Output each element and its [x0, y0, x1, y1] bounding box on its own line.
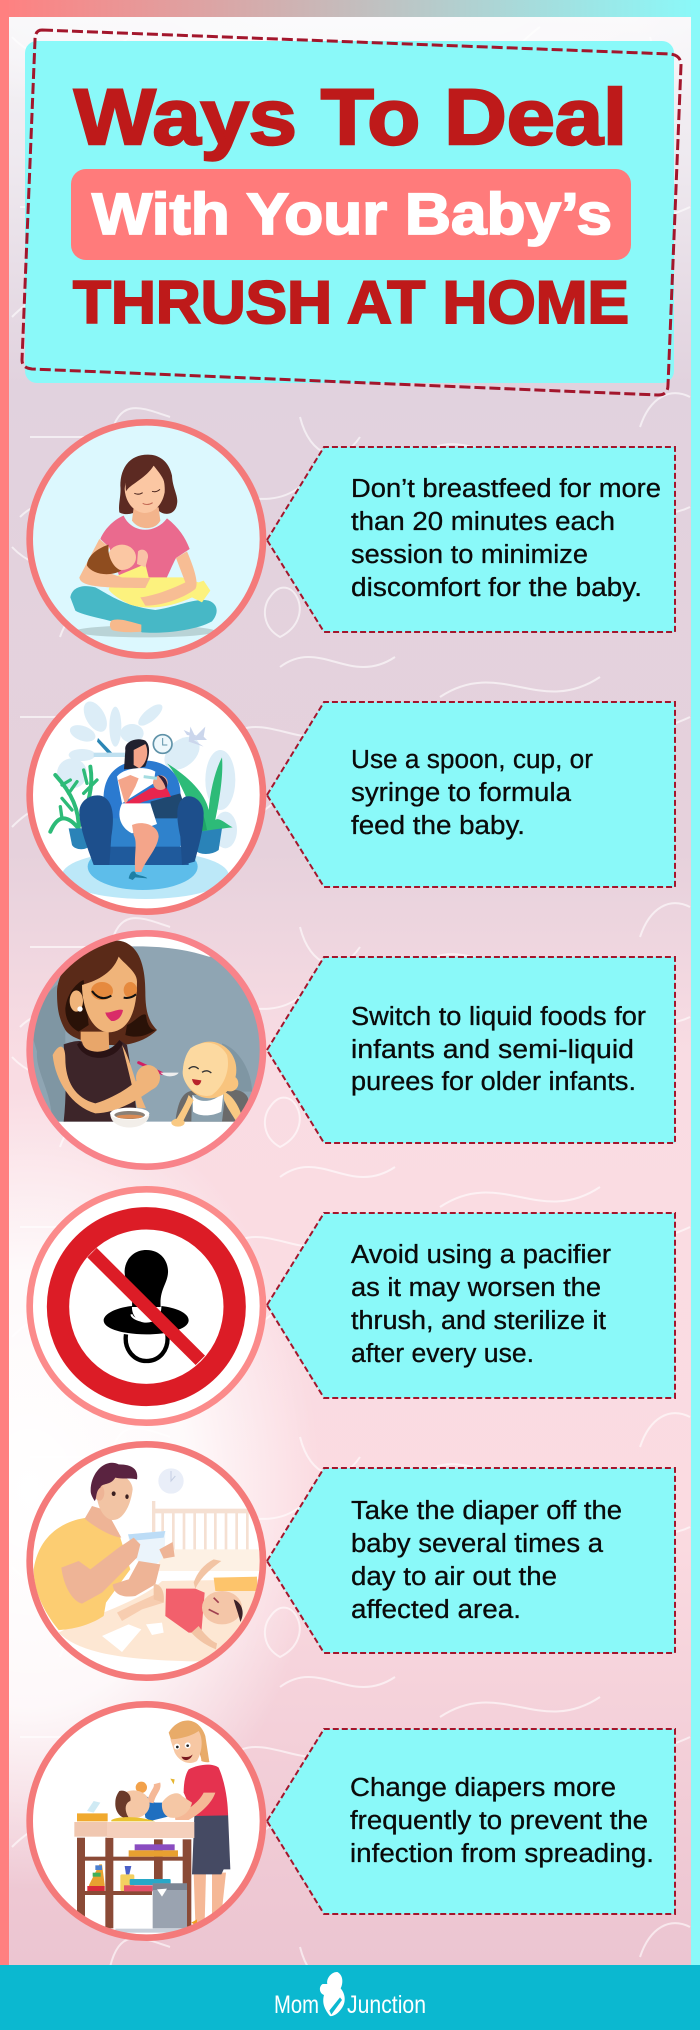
callout shape	[267, 1468, 675, 1653]
callout shape	[267, 447, 675, 632]
callout text: affected area.	[351, 1596, 521, 1624]
title line 2: With Your Baby’s	[92, 182, 612, 247]
callout text	[351, 475, 661, 602]
item 4: callout	[267, 1213, 675, 1398]
callout text: Don’t breastfeed for more	[351, 475, 661, 503]
item 1: callout	[267, 447, 675, 632]
callout text: infants and semi-liquid	[351, 1036, 634, 1064]
callout shape	[267, 702, 675, 887]
callout text: day to air out the	[351, 1563, 557, 1591]
title line 1: Ways To Deal	[74, 72, 627, 161]
item 3: spoon feeding circle	[29, 933, 269, 1167]
callout text: frequently to prevent the	[350, 1807, 648, 1835]
logo text: Junction: Junction	[347, 1991, 426, 2019]
callout text: infection from spreading.	[350, 1840, 654, 1868]
callout shape	[267, 1729, 675, 1914]
title pill	[71, 169, 631, 260]
callout shape	[267, 957, 675, 1143]
item 2: formula feeding circle	[30, 678, 263, 912]
item 3: callout	[267, 957, 675, 1143]
callout text: thrush, and sterilize it	[351, 1307, 606, 1335]
callout text: discomfort for the baby.	[351, 574, 642, 602]
callout text	[351, 1241, 612, 1368]
callout text	[351, 1497, 622, 1624]
item 6: mother at changing table circle	[30, 1704, 263, 1938]
title line 3: THRUSH AT HOME	[73, 269, 629, 336]
callout text	[350, 1774, 654, 1868]
item 5: father changing diaper circle	[30, 1444, 265, 1678]
callout text: baby several times a	[351, 1530, 604, 1558]
item 1: breastfeeding circle	[30, 422, 263, 656]
item 2: callout	[267, 702, 675, 887]
item 6: callout	[267, 1729, 675, 1914]
callout text: Avoid using a pacifier	[351, 1241, 612, 1269]
callout text	[351, 1003, 647, 1096]
icon: prohibition ring	[58, 1218, 235, 1395]
item 4: no pacifier sign	[30, 1189, 263, 1423]
callout text: syringe to formula	[351, 779, 572, 807]
callout text: as it may worsen the	[351, 1274, 601, 1302]
callout text: purees for older infants.	[351, 1068, 636, 1096]
title dashed border	[22, 30, 681, 395]
callout text: session to minimize	[351, 541, 588, 569]
footer bar	[0, 1965, 700, 2030]
icon: mother and child	[320, 1972, 345, 2016]
item 5: callout	[267, 1468, 675, 1653]
title background	[25, 41, 674, 383]
callout text: Take the diaper off the	[351, 1497, 622, 1525]
callout text: Switch to liquid foods for	[351, 1003, 647, 1031]
icon: pacifier	[104, 1250, 189, 1361]
callout text	[351, 746, 594, 840]
logo text: Mom: Mom	[274, 1991, 319, 2019]
callout text: than 20 minutes each	[351, 508, 615, 536]
title panel	[22, 30, 681, 395]
callout text: Use a spoon, cup, or	[351, 746, 594, 774]
logo: MomJunction	[274, 1972, 426, 2019]
callout text: after every use.	[351, 1340, 534, 1368]
callout text: feed the baby.	[351, 812, 525, 840]
callout shape	[267, 1213, 675, 1398]
callout text: Change diapers more	[350, 1774, 616, 1802]
